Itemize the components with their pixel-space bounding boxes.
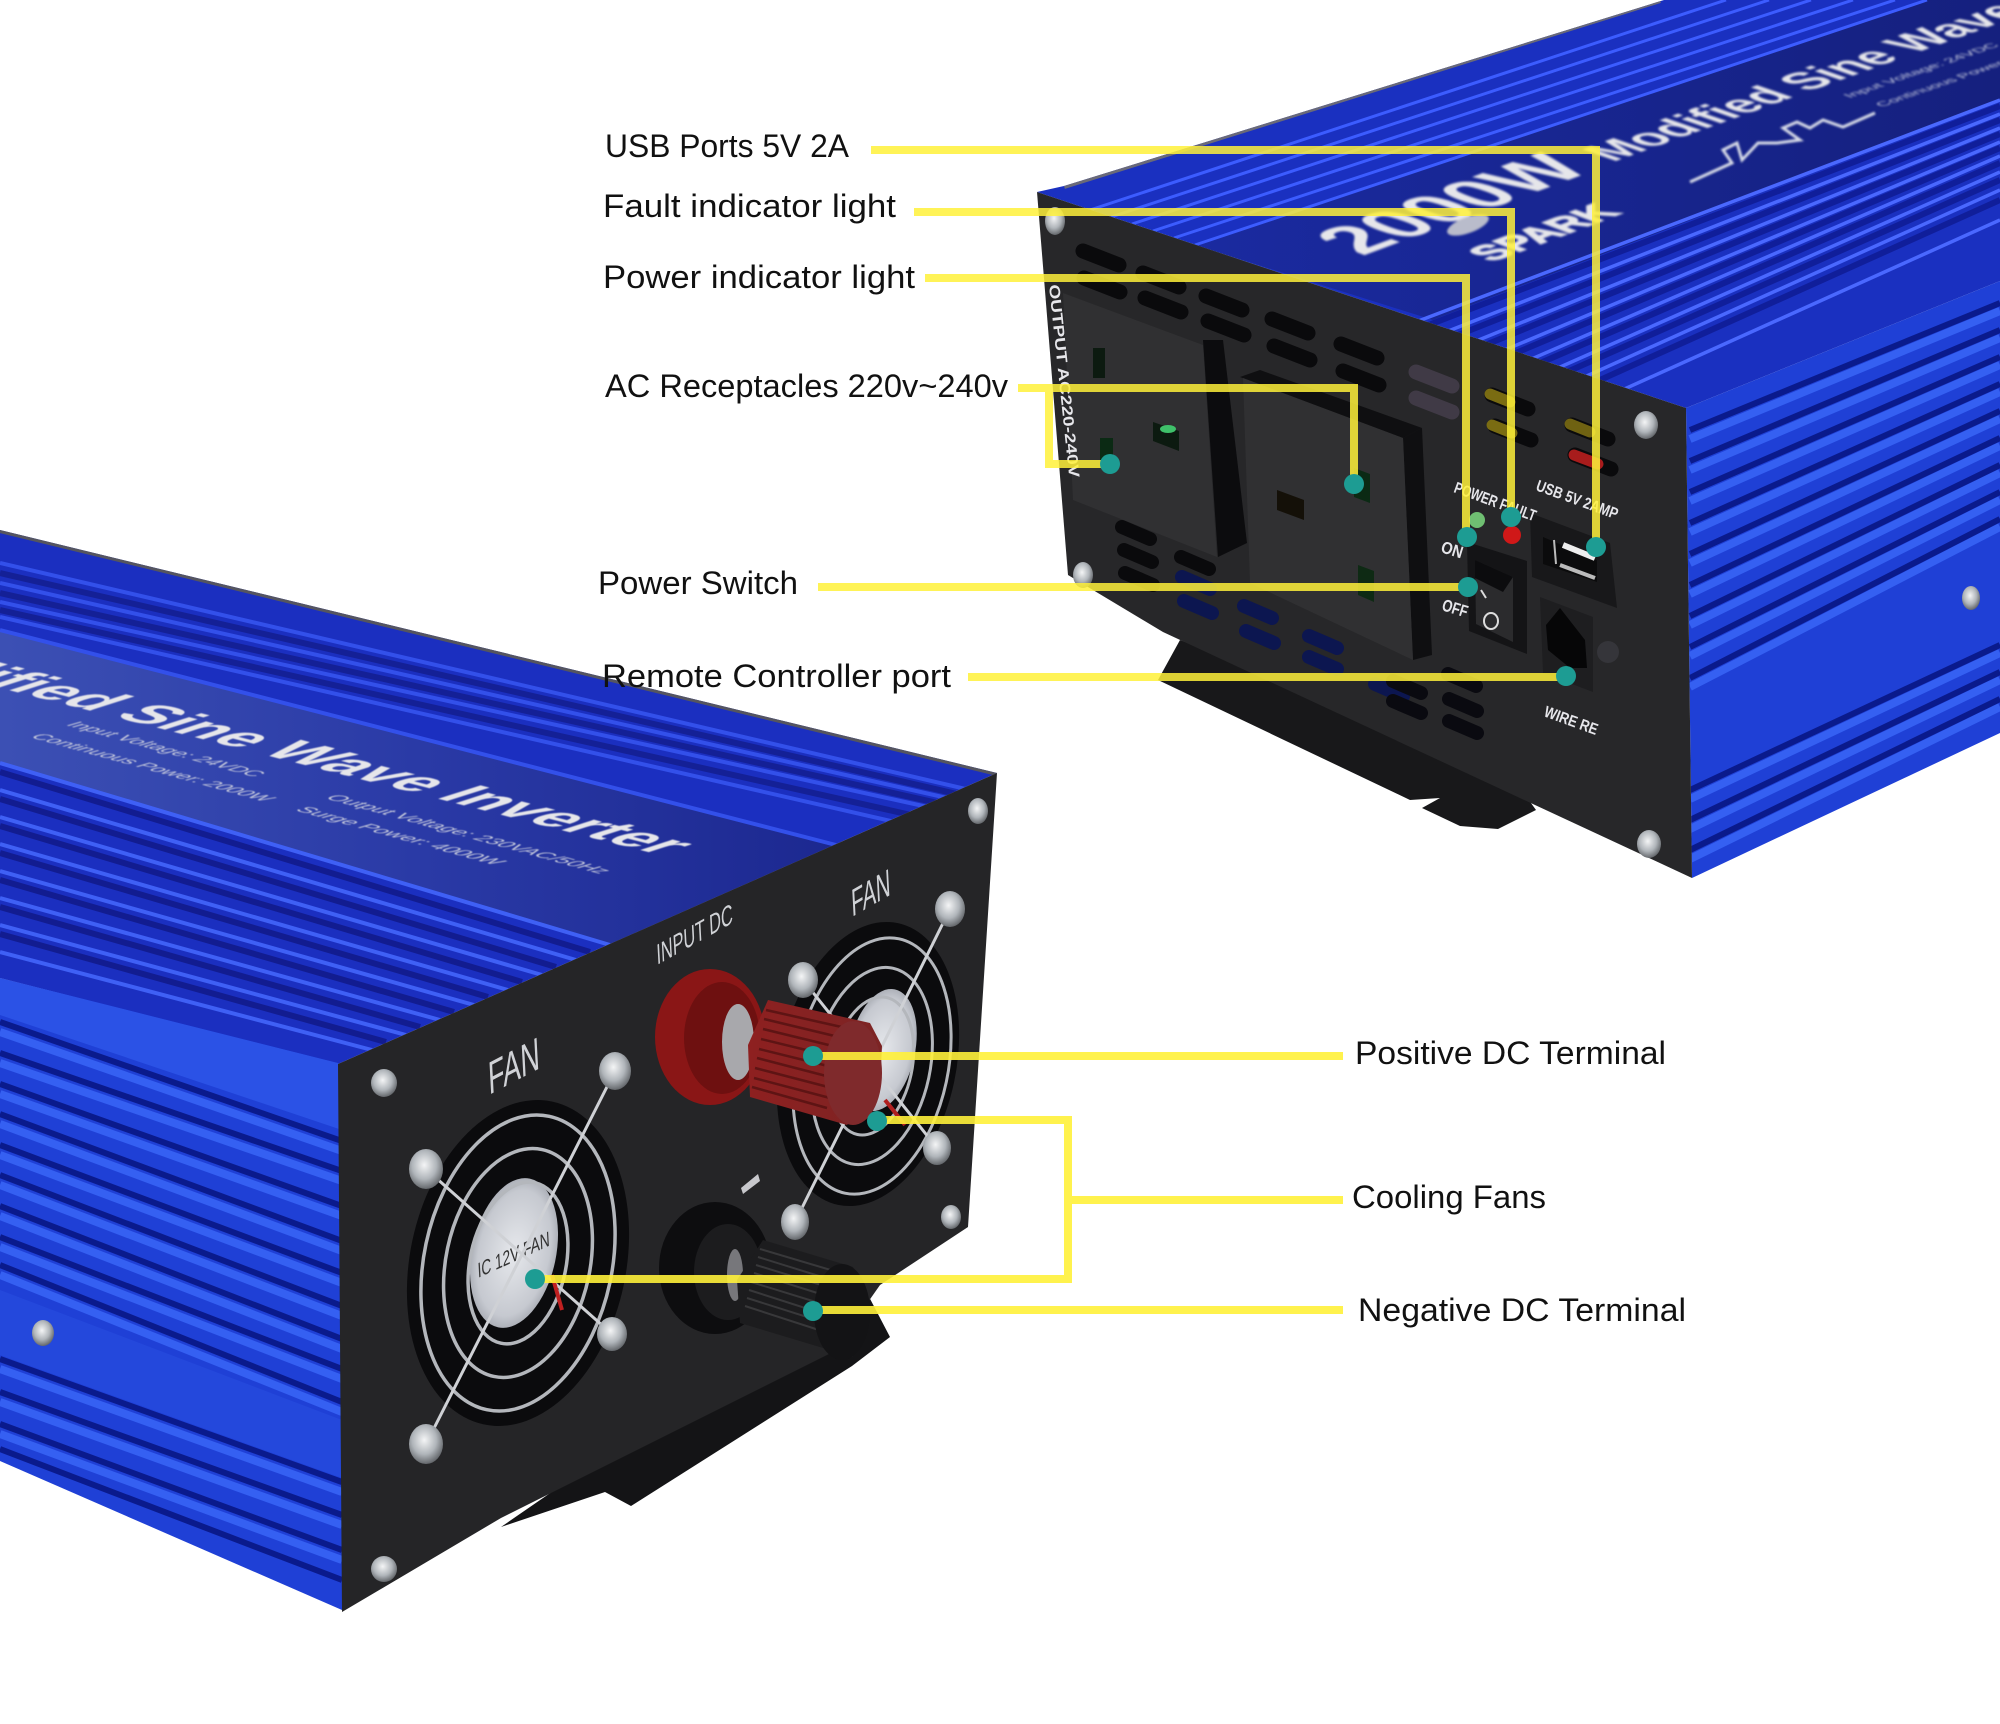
panel labels: ON bbox=[1439, 538, 1465, 562]
callout: cooling fans: Cooling Fans bbox=[1352, 1179, 1546, 1215]
top face bbox=[1037, 0, 2000, 408]
callout: remote controller port bbox=[602, 658, 1576, 694]
callout: AC receptacles: AC Receptacles 220v~240v bbox=[605, 368, 1008, 404]
callout: positive DC terminal bbox=[803, 1035, 1666, 1071]
mounting bracket bbox=[501, 1293, 890, 1527]
callout: power switch: Power Switch bbox=[598, 565, 798, 601]
left fan: IC 12V FAN bbox=[477, 1227, 550, 1283]
panel labels: FAN bbox=[487, 1028, 541, 1106]
panel labels: WIRE RE bbox=[1542, 704, 1600, 739]
callout: fault indicator light bbox=[603, 188, 1521, 527]
spec text: Input Voltage: 24VDC bbox=[1840, 42, 2000, 99]
brand mark bbox=[1445, 210, 1491, 240]
AC socket 1 bbox=[1063, 293, 1247, 557]
callout: negative DC terminal bbox=[803, 1292, 1686, 1328]
panel labels bbox=[487, 861, 891, 1106]
negative sign bbox=[741, 1174, 760, 1194]
panel screws bbox=[371, 798, 988, 1582]
inverter: upper right, output side bbox=[1030, 0, 2000, 890]
positive DC terminal bbox=[655, 969, 882, 1125]
callout: power indicator light: Power indicator light bbox=[603, 259, 915, 295]
callout: fault indicator light: Fault indicator light bbox=[603, 188, 896, 224]
spec text: Continuous Power: 2000W bbox=[24, 732, 280, 803]
rocker switch bbox=[1467, 542, 1527, 654]
front panel bbox=[1037, 192, 1692, 878]
panel labels: INPUT DC bbox=[656, 898, 734, 972]
callout: negative DC terminal: Negative DC Terminal bbox=[1358, 1292, 1686, 1328]
callout: USB ports bbox=[605, 128, 1606, 557]
callout: positive DC terminal: Positive DC Terminal bbox=[1355, 1035, 1666, 1071]
inverter: lower left, DC input side bbox=[0, 520, 1000, 1615]
spec text: Input Voltage: 24VDC bbox=[60, 720, 271, 778]
spec text: Output Voltage: 230VAC/50Hz bbox=[319, 793, 616, 875]
top face bbox=[0, 520, 1000, 1080]
front panel bbox=[338, 773, 997, 1612]
product lettering on top bbox=[1293, 0, 2000, 265]
panel screws bbox=[1045, 207, 1661, 858]
panel labels bbox=[1439, 478, 1621, 739]
power rating: 2000W bbox=[1293, 145, 1611, 262]
remote controller port bbox=[1540, 597, 1619, 692]
product lettering on top bbox=[0, 630, 716, 875]
side face bbox=[0, 970, 345, 1615]
spec text: Surge Power: 4000W bbox=[289, 805, 511, 866]
panel labels: FAN bbox=[850, 861, 891, 925]
brand: SPARK bbox=[1457, 200, 1631, 265]
callout: power switch bbox=[598, 565, 1478, 601]
left fan bbox=[378, 1052, 658, 1464]
ventilation slots bbox=[1083, 251, 1611, 733]
panel labels: OFF bbox=[1440, 596, 1470, 621]
callout: remote controller port: Remote Controller port bbox=[602, 658, 951, 694]
callout: USB ports: USB Ports 5V 2A bbox=[605, 128, 850, 164]
side screw bbox=[1962, 586, 1980, 610]
side face bbox=[1680, 270, 2000, 890]
callout: cooling fans bbox=[525, 1111, 1546, 1289]
panel labels: POWER FAULT bbox=[1452, 480, 1538, 525]
panel labels: USB 5V 2AMP bbox=[1534, 478, 1621, 523]
USB port bbox=[1530, 513, 1617, 608]
mounting bracket bbox=[1158, 640, 1536, 829]
callout: power indicator light bbox=[603, 259, 1477, 547]
callout: AC receptacles bbox=[605, 368, 1364, 494]
negative DC terminal bbox=[659, 1202, 870, 1360]
indicator lights bbox=[1469, 512, 1521, 544]
AC socket 2 bbox=[1240, 370, 1432, 660]
waveform bbox=[1690, 113, 1875, 182]
right fan bbox=[752, 891, 984, 1240]
output voltage text: OUTPUT AC220-240V bbox=[1045, 284, 1082, 478]
side screw bbox=[32, 1320, 54, 1346]
